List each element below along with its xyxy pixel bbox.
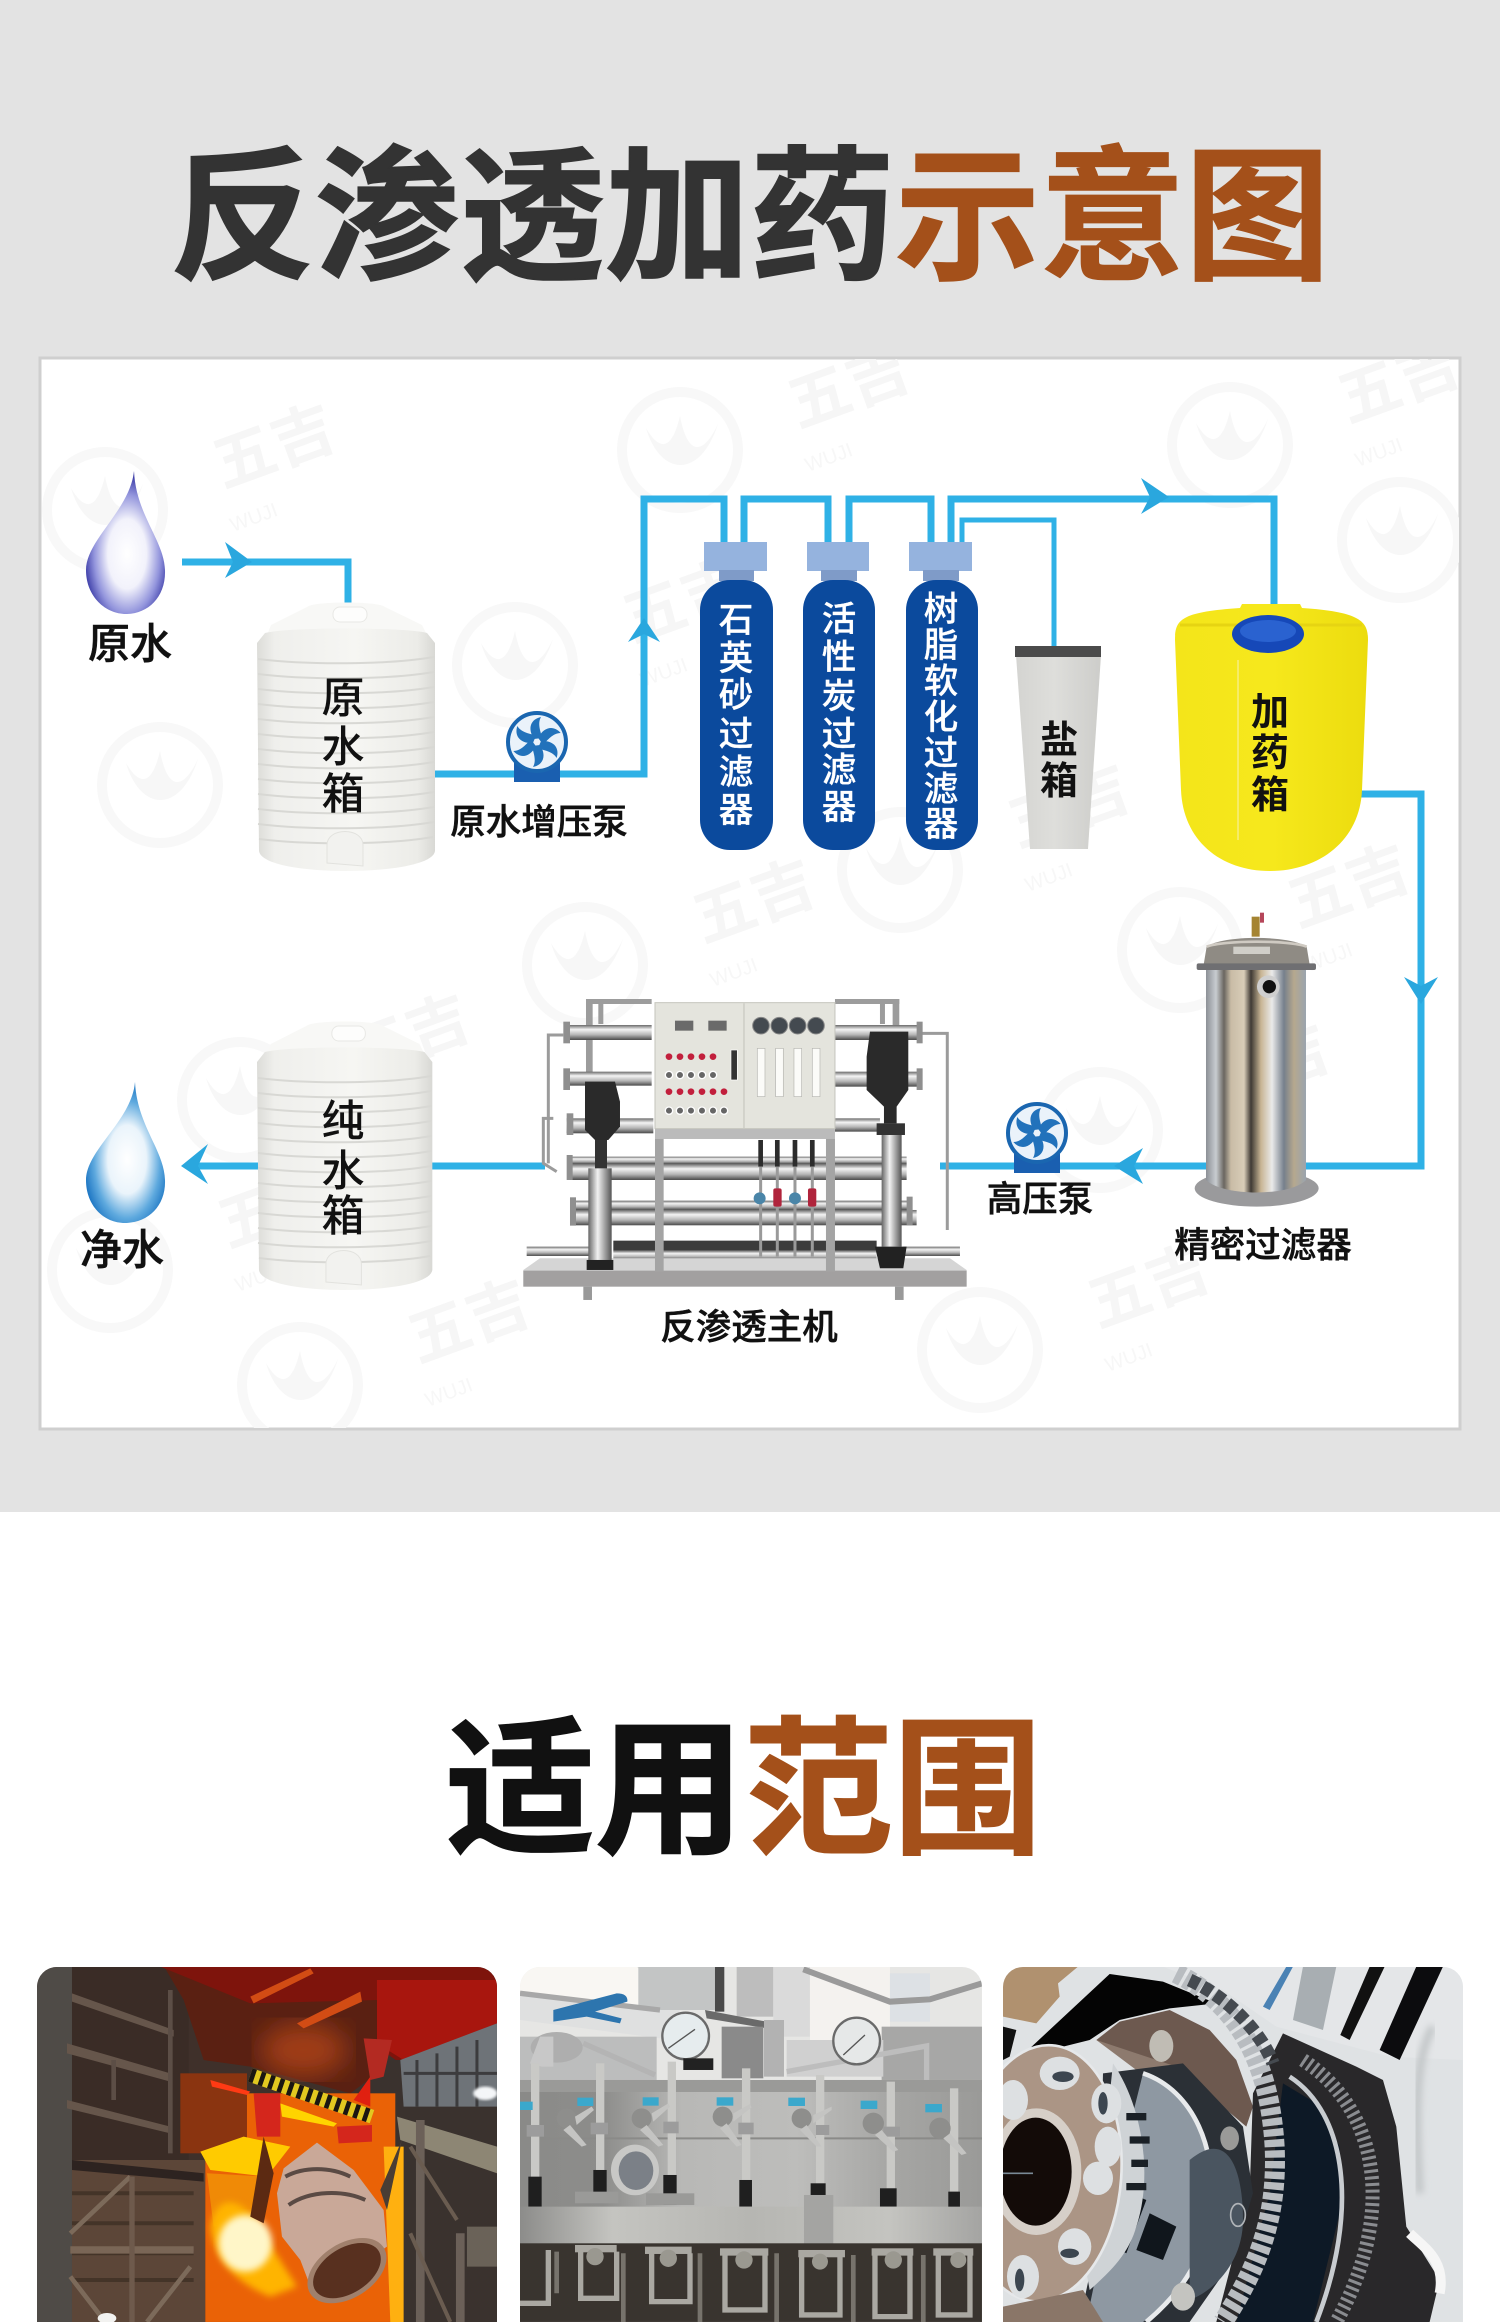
icon: high pressure pump [1008,1104,1066,1173]
dosing tank [1175,604,1368,871]
label: pure water: 净水 [80,1226,164,1274]
photo: steel foundry [37,1960,497,2322]
unit frame [586,999,899,1089]
arrow: raw water inflow [225,542,252,578]
pipes: all water lines [182,499,1421,1166]
label: resin softening filter: 树脂软化过滤器 [924,591,958,844]
pure water tank [257,1022,432,1290]
arrow: toward high pressure pump [1114,1148,1143,1184]
icon: raw water drop [86,471,165,614]
icon: raw water booster pump [508,713,566,782]
filter: quartz sand [700,542,773,850]
label: raw water: 原水 [88,620,172,668]
label: salt tank: 盐箱 [1040,720,1078,803]
label: precision filter: 精密过滤器 [1174,1225,1352,1265]
panel: process diagram [40,329,1500,1443]
reverse osmosis main unit [523,999,967,1300]
photo: filling machine [520,1960,982,2322]
label: quartz sand filter: 石英砂过滤器 [719,602,753,830]
membrane tubes [567,1025,920,1225]
filter: softening resin [906,542,978,850]
pumps [595,1138,607,1170]
arrow: to dosing tank [1141,478,1169,514]
arrow: down to precision filter [1404,977,1438,1004]
background: grey upper section [0,0,1500,1512]
control panel [655,1003,835,1129]
filter: activated carbon [803,542,875,850]
background: white lower section [0,1512,1500,2322]
uprights [655,1138,664,1272]
label: RO main unit: 反渗透主机 [660,1307,838,1347]
raw water tank [257,602,435,871]
label: booster pump: 原水增压泵 [450,802,628,842]
arrow: pure water outflow [181,1144,208,1184]
title: scope of application: 适用范围 [446,1707,1042,1874]
label: high pressure pump: 高压泵 [987,1179,1093,1219]
salt tank [1015,646,1101,849]
base frame [523,1258,967,1287]
title: reverse osmosis dosing diagram: 反渗透加药示意图 [170,137,1330,299]
arrow: up to filters [628,618,660,642]
label: activated carbon filter: 活性炭过滤器 [822,601,856,827]
label: dosing tank: 加药箱 [1251,692,1289,817]
watermark pattern [47,329,1500,1443]
icon: pure water drop [86,1082,165,1223]
flow lines and valves [761,1140,812,1167]
label: pure water tank: 纯水箱 [322,1098,364,1241]
label: raw water tank: 原水箱 [322,675,364,819]
photo: chrome gear [1003,1967,1463,2322]
precision filter [1195,913,1319,1207]
